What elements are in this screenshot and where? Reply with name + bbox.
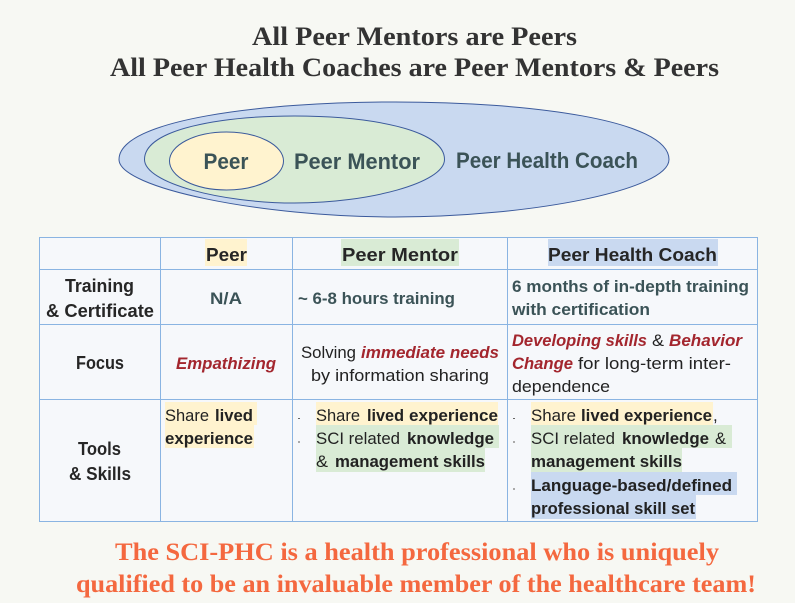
focus: Peer Health Coach: Change — [512, 354, 573, 373]
tools: Peer Mentor — [298, 402, 499, 472]
tools: Peer Health Coach: management skills — [531, 452, 682, 471]
tools: Peer Health Coach: professional skill set — [531, 499, 695, 518]
training: Peer Health Coach: 6 months of in-depth training — [512, 277, 749, 296]
training: Peer Mentor: ~ 6-8 hours training — [298, 289, 455, 308]
tools: Peer Mentor: management skills — [335, 452, 485, 471]
ellipse: Peer Mentor: Peer Mentor — [294, 149, 420, 174]
title: All Peer Health Coaches are Peer Mentors & Peers — [110, 53, 719, 82]
header: Peer Health Coach — [548, 239, 718, 266]
tools: Peer Mentor: lived — [367, 406, 404, 425]
tools: Peer Mentor: Share — [316, 406, 360, 425]
tools: Peer Mentor: SCI related — [316, 429, 400, 448]
tools: Peer Mentor: & — [316, 452, 329, 471]
training: Peer Health Coach — [511, 277, 749, 319]
focus: Peer Mentor: by information sharing — [311, 366, 489, 385]
row label: Tools & Skills: Tools — [78, 439, 121, 459]
header: Peer Health Coach: Peer Health Coach — [548, 245, 717, 265]
row label: Training & Certificate — [46, 276, 154, 321]
ellipse: Peer — [170, 132, 284, 190]
focus: Peer Health Coach: Behavior — [669, 331, 743, 350]
ellipse: Peer Health Coach: Peer Health Coach — [456, 148, 638, 173]
focus: Peer Mentor: immediate needs — [361, 343, 499, 362]
comparison table — [40, 238, 758, 522]
closing statement: qualified to be an invaluable member of the healthcare team! — [76, 571, 756, 598]
title: All Peer Mentors are Peers — [252, 22, 577, 51]
header: Peer Mentor: Peer Mentor — [342, 245, 458, 265]
focus: Peer Mentor: Solving — [301, 343, 356, 362]
ellipse: Peer: Peer — [204, 149, 249, 174]
tools: Peer: Share — [165, 406, 209, 425]
tools: Peer Health Coach: lived experience — [581, 406, 712, 425]
header: Peer — [205, 239, 247, 266]
tools: Peer Health Coach: Share — [531, 406, 576, 425]
focus: Peer: Empathizing — [176, 354, 277, 373]
closing statement: The SCI-PHC is a health professional who is uniquely — [115, 539, 720, 566]
tools: Peer Mentor: knowledge — [407, 429, 494, 448]
tools: Peer — [165, 402, 257, 448]
focus: Peer Health Coach: dependence — [512, 377, 610, 396]
tools: Peer Health Coach — [513, 402, 737, 519]
ellipse: Peer Mentor — [144, 116, 444, 203]
training: Peer Health Coach: with certification — [511, 300, 650, 319]
tools: Peer: experience — [165, 429, 253, 448]
focus: Peer Health Coach — [512, 331, 743, 396]
row label: Focus: Focus — [76, 353, 124, 373]
tools: Peer: lived — [215, 406, 253, 425]
tools: Peer Mentor: experience — [409, 406, 498, 425]
ellipse: Peer Health Coach — [119, 102, 669, 217]
tools: Peer Health Coach: , — [713, 406, 718, 425]
title — [110, 22, 719, 82]
focus: Peer Health Coach: & — [652, 331, 665, 350]
header: Peer Mentor — [341, 239, 459, 266]
closing statement — [76, 539, 756, 598]
tools: Peer Health Coach: knowledge — [622, 429, 709, 448]
row label: Tools & Skills — [69, 439, 131, 484]
tools: Peer Health Coach: SCI related — [531, 429, 615, 448]
focus: Peer Health Coach: for long-term inter- — [578, 354, 731, 373]
focus: Peer Mentor — [301, 343, 499, 385]
training: Peer: N/A — [210, 289, 242, 308]
focus: Peer Health Coach: Developing skills — [512, 331, 647, 350]
row label: Tools & Skills: & Skills — [69, 464, 131, 484]
row label: Training & Certificate: & Certificate — [46, 301, 154, 321]
tools: Peer Health Coach: Language-based/defined — [531, 476, 732, 495]
row label: Training & Certificate: Training — [65, 276, 134, 296]
nested ellipse diagram — [119, 102, 669, 217]
tools: Peer Health Coach: & — [715, 429, 727, 448]
header: Peer: Peer — [206, 245, 247, 265]
